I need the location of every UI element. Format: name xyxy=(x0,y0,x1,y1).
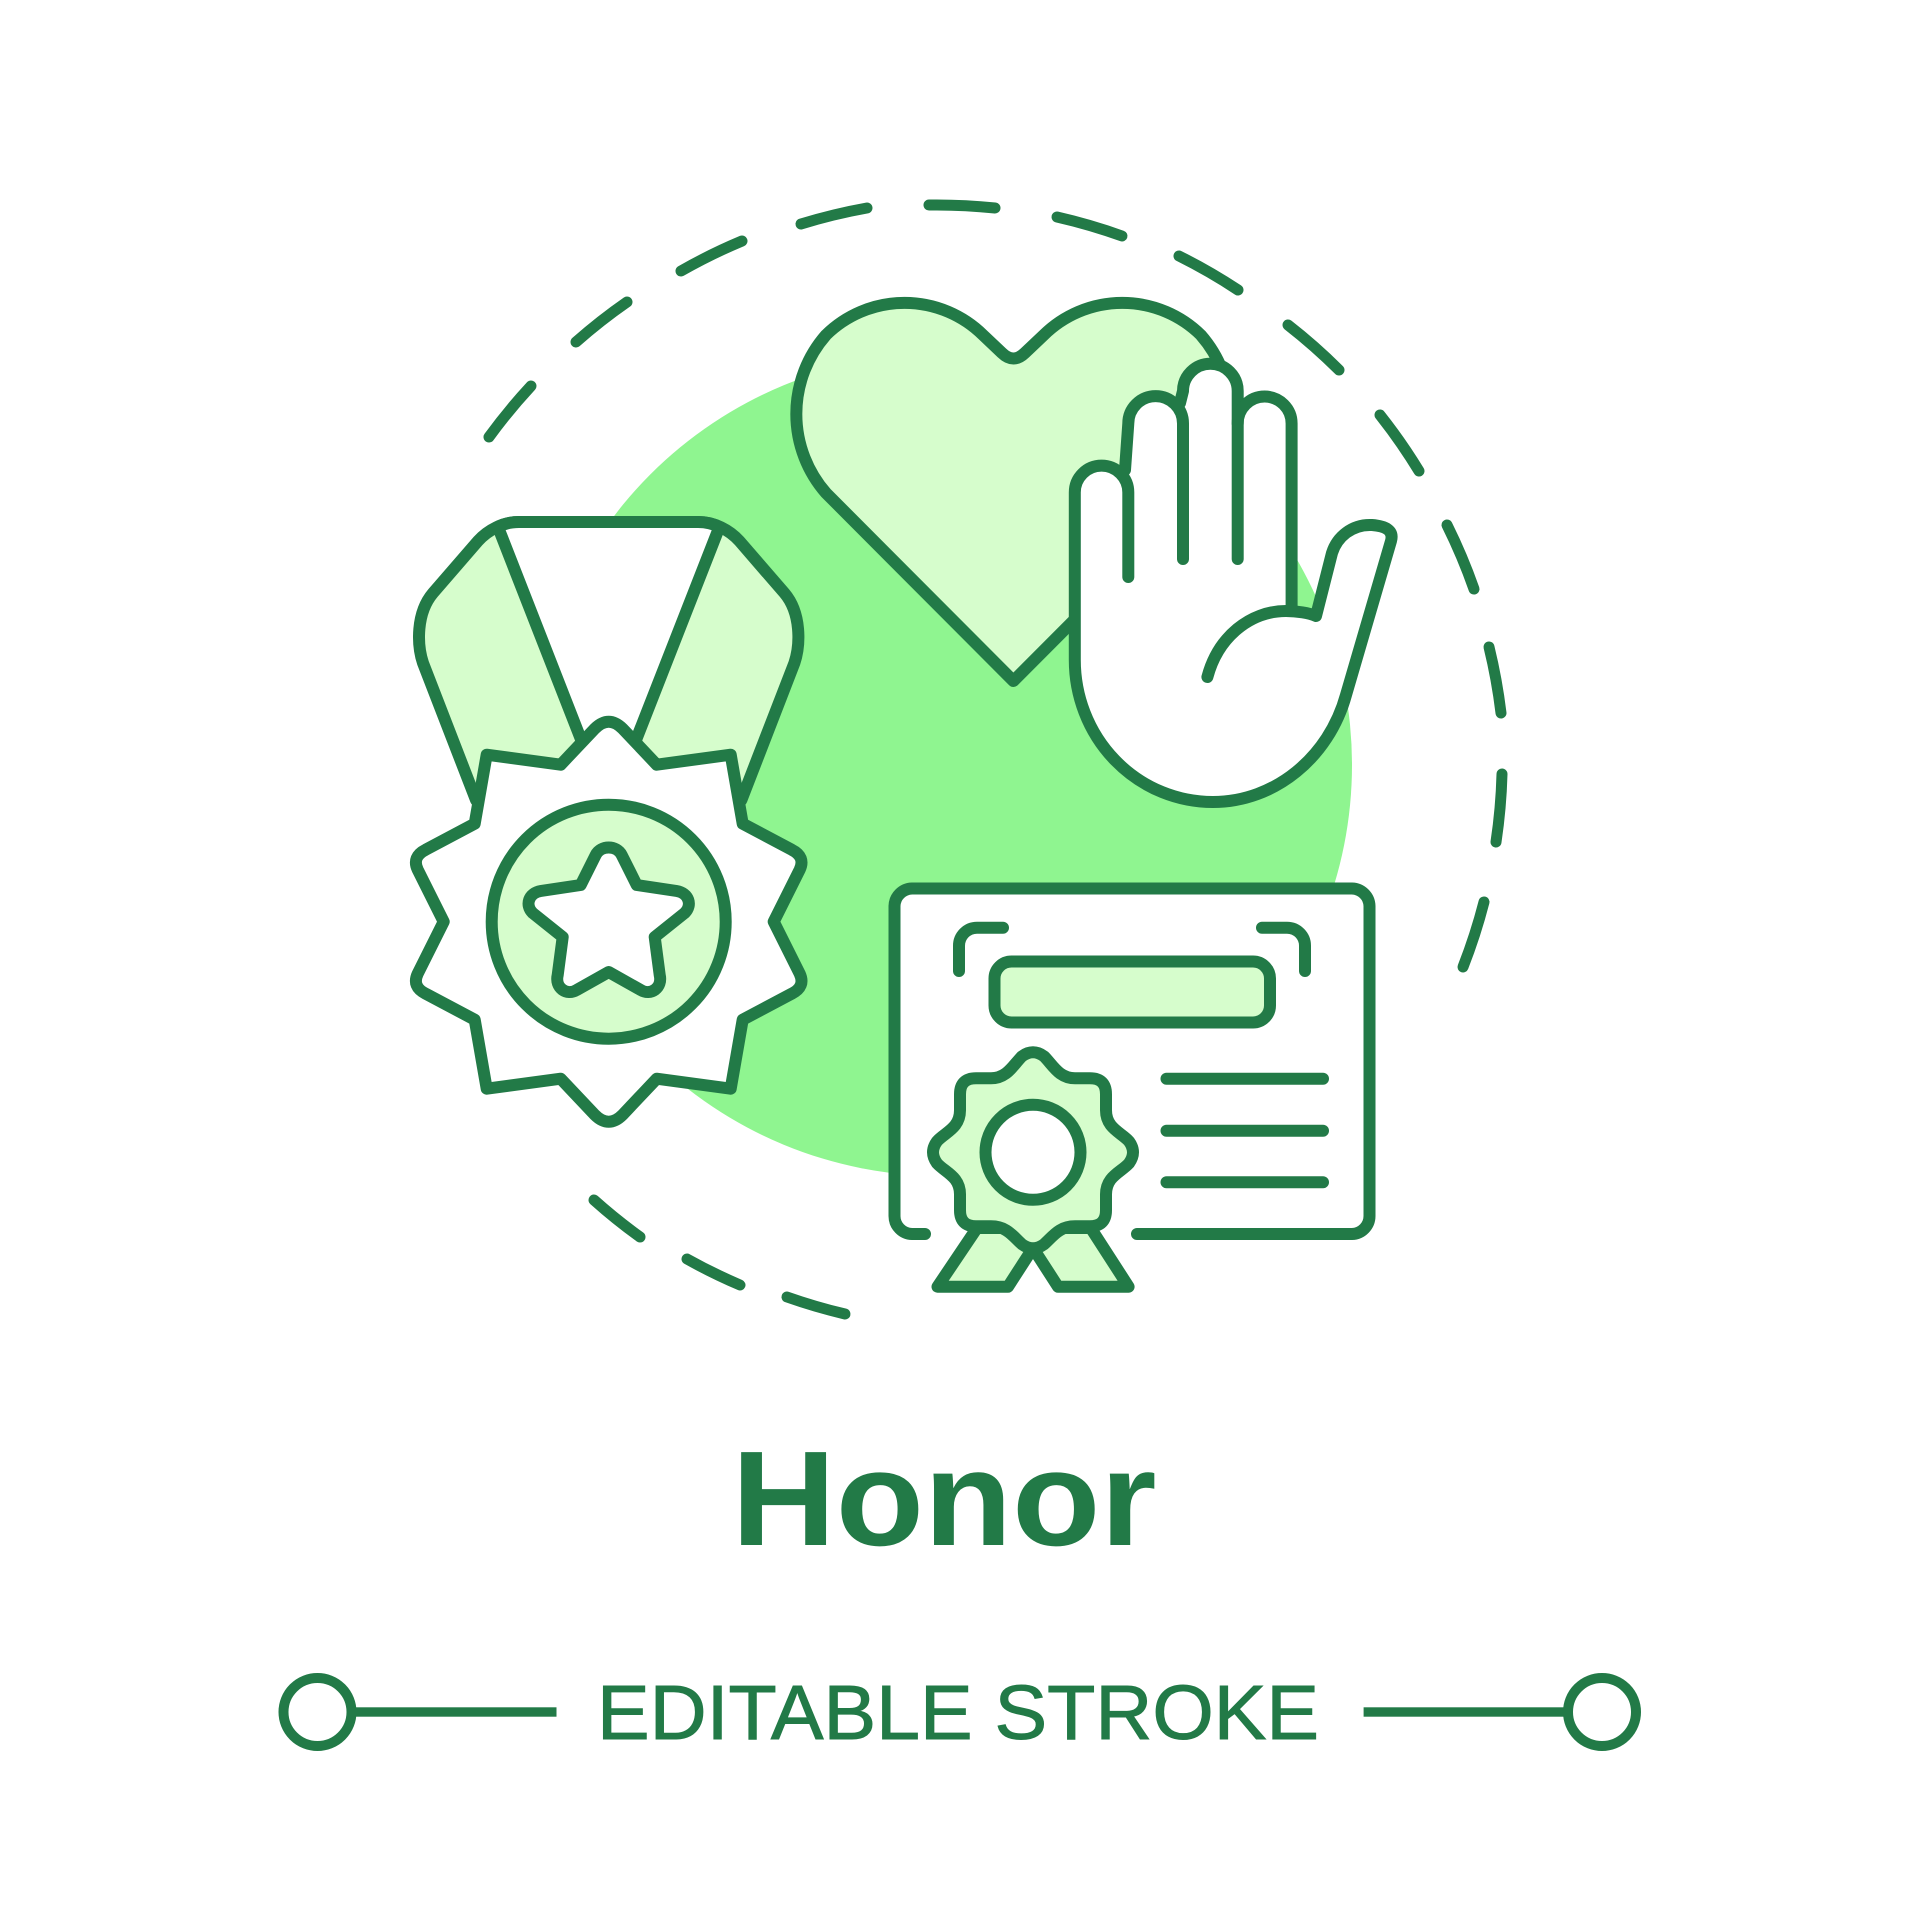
icon: heart xyxy=(796,303,1230,681)
certificate title box xyxy=(994,962,1270,1022)
left connector xyxy=(284,1678,556,1746)
caption: editable stroke: EDITABLE STROKE xyxy=(597,1670,1319,1756)
icon: certificate xyxy=(894,888,1370,1287)
medal badge xyxy=(416,722,802,1122)
seal ribbon tails xyxy=(938,1228,1129,1287)
title: Honor xyxy=(732,1423,1156,1574)
green background circle xyxy=(530,354,1352,1176)
medal ribbon xyxy=(419,522,798,800)
medal star xyxy=(529,848,689,992)
certificate border xyxy=(894,888,1370,1234)
certificate text lines xyxy=(1166,1079,1323,1182)
dashed ring xyxy=(489,205,1502,1314)
certificate seal xyxy=(933,1052,1133,1248)
right connector xyxy=(1364,1678,1636,1746)
certificate corner brackets xyxy=(959,928,1305,971)
icon: medal xyxy=(416,522,802,1122)
icon: raised hand xyxy=(1075,364,1392,802)
